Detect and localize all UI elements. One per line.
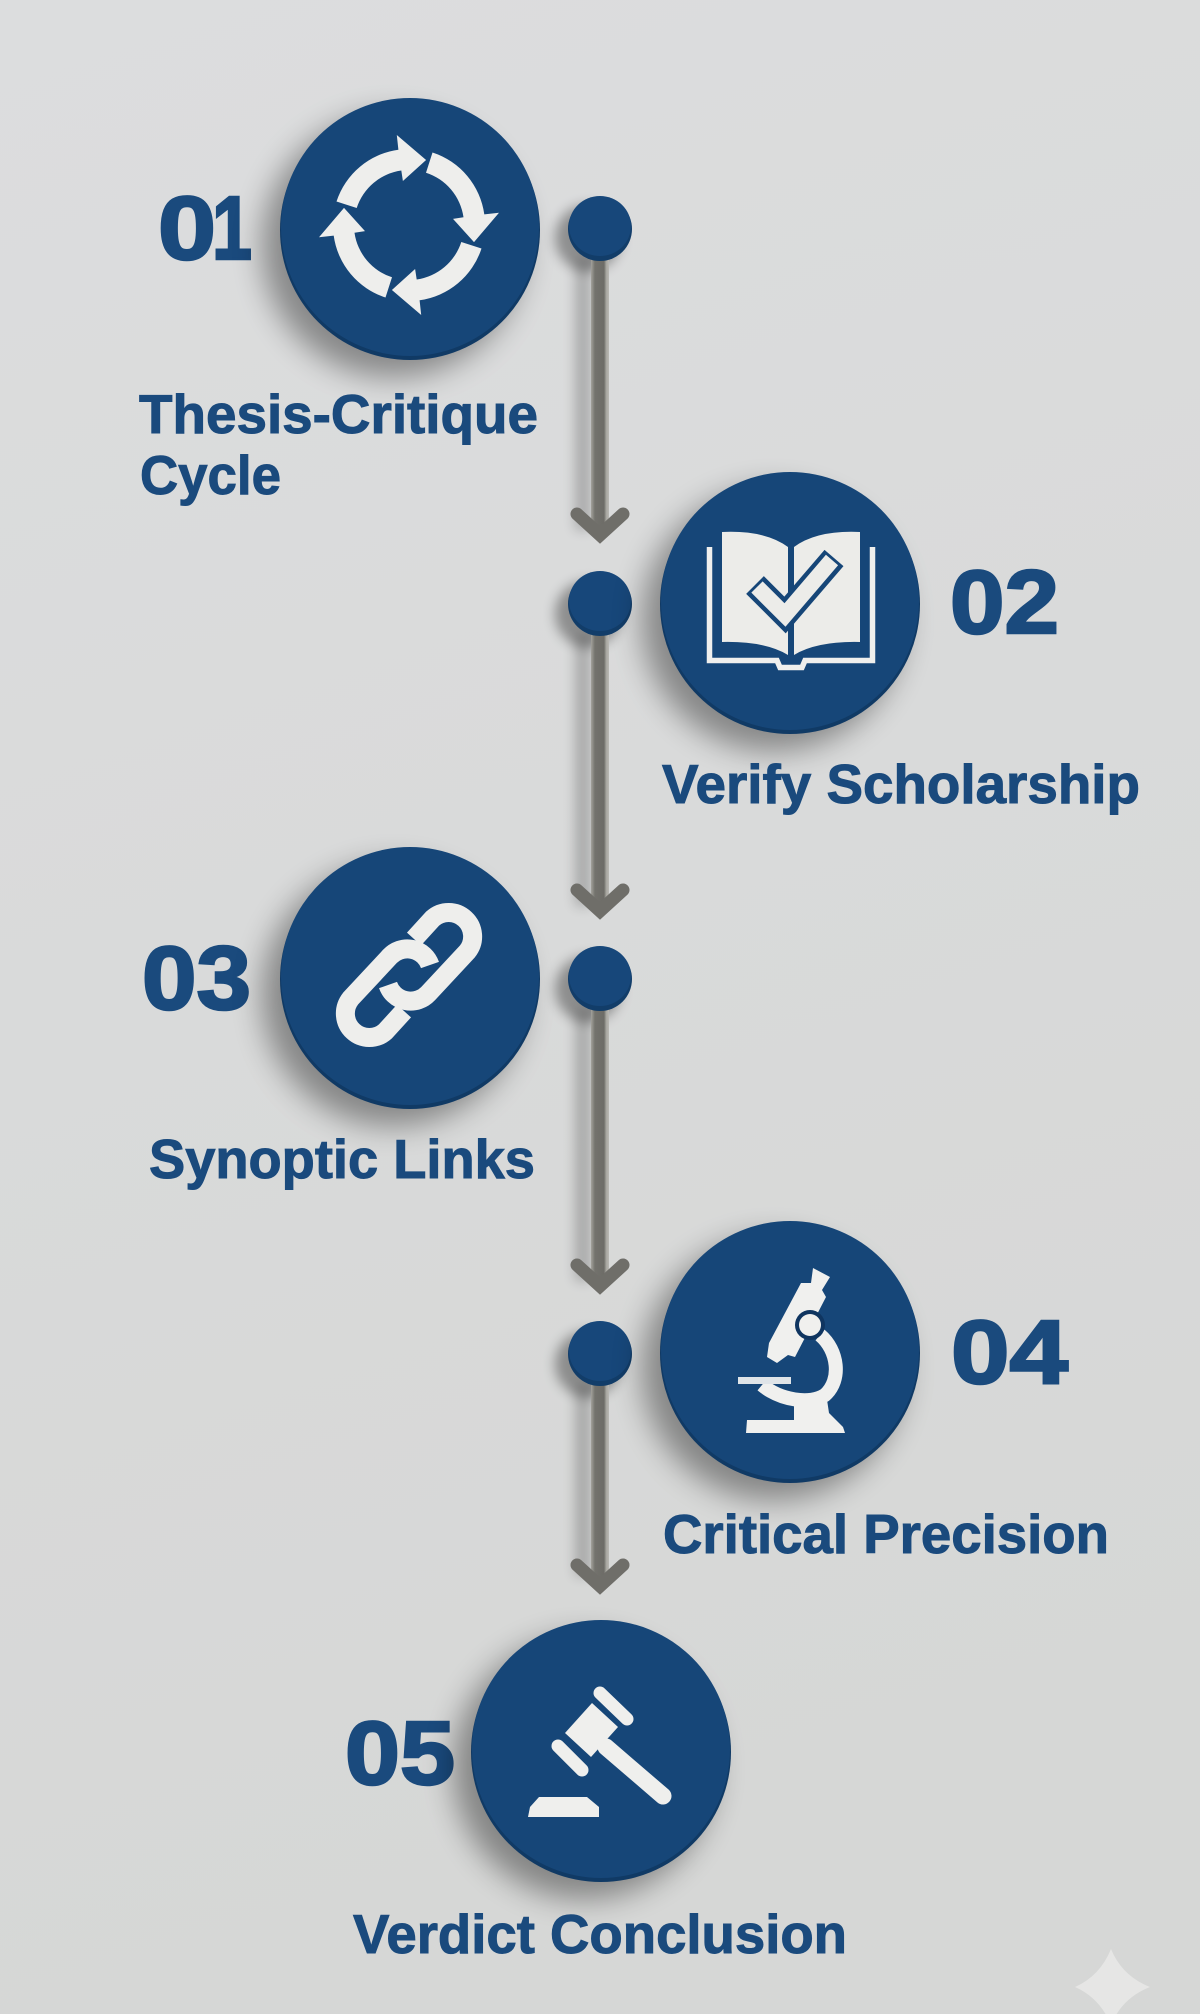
step 4 disc with microscope icon xyxy=(642,1221,920,1500)
step 2 label: Verify Scholarship xyxy=(662,753,1140,815)
connector 2: dot and arrow xyxy=(555,571,632,911)
step 2 number: 02 xyxy=(950,553,1059,653)
step 1 number xyxy=(158,179,252,279)
step 2 xyxy=(642,472,1140,815)
watermark: four-point star xyxy=(1075,1949,1150,2014)
step 3 disc with link icon xyxy=(262,847,540,1126)
step 1 disc with cycle icon xyxy=(262,98,540,377)
step 1 label: Thesis-Critique xyxy=(139,383,538,445)
connector 3: dot and arrow xyxy=(555,946,632,1286)
connector 4: dot and arrow xyxy=(555,1321,632,1586)
step 2 disc with book icon xyxy=(642,472,920,751)
step 1 label: Cycle xyxy=(140,444,281,506)
step 3 label: Synoptic Links xyxy=(149,1128,535,1190)
connector 1: dot and arrow xyxy=(555,196,632,535)
step 4 label: Critical Precision xyxy=(663,1503,1109,1565)
step 5 number: 05 xyxy=(345,1704,455,1804)
step 1 xyxy=(139,98,540,506)
step 1 number: 1 xyxy=(212,179,252,279)
step 3 number: 03 xyxy=(142,929,251,1029)
step 1 label xyxy=(139,383,538,506)
step 5 disc with gavel icon xyxy=(453,1620,731,1899)
step 4 number: 04 xyxy=(951,1303,1068,1403)
step 4 xyxy=(642,1221,1109,1565)
step 5 label: Verdict Conclusion xyxy=(353,1903,847,1965)
step 3 xyxy=(142,847,540,1190)
step 5 xyxy=(345,1620,847,1965)
step 1 number: 0 xyxy=(158,179,216,279)
